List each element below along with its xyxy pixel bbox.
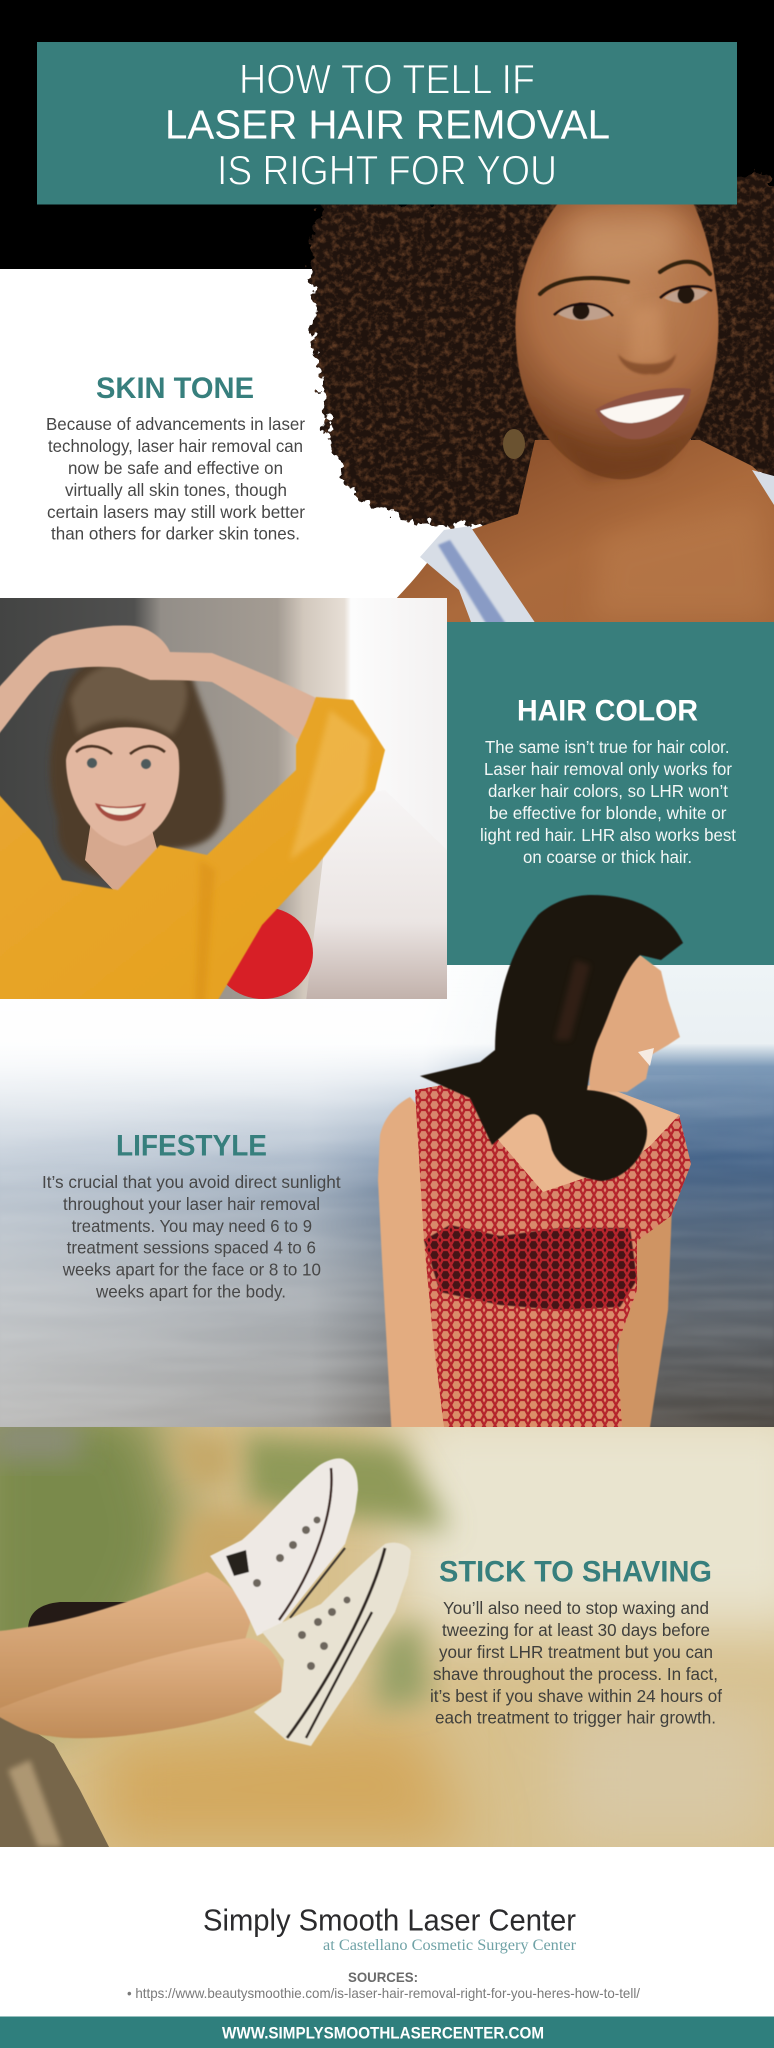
room background — [0, 598, 447, 999]
text: lifestyle body: treatments. You may need 6 to 9 — [72, 1216, 312, 1236]
smile — [638, 1048, 654, 1066]
face — [66, 727, 179, 846]
sources: SOURCES: — [348, 1969, 418, 1985]
text: hair color body: be effective for blonde, white or — [489, 803, 727, 823]
title line 3: IS RIGHT FOR YOU — [217, 147, 557, 194]
eyes and brows — [540, 262, 712, 320]
text: lifestyle body: It’s crucial that you avoid direct sunlight — [42, 1172, 341, 1192]
panel: stick to shaving — [0, 1400, 774, 1847]
photo: woman in yellow shirt with arms raised — [0, 598, 447, 1010]
heading: hair color: HAIR COLOR — [517, 695, 698, 728]
car door — [0, 1710, 109, 1847]
text: lifestyle body: throughout your laser hair removal — [63, 1194, 320, 1214]
face — [515, 200, 718, 479]
neck — [85, 825, 157, 890]
text: stick to shaving body: your first LHR treatment but you can — [439, 1642, 713, 1662]
red balloon — [226, 908, 313, 999]
photo: crossed legs in white sneakers out of a car window — [0, 1400, 774, 1847]
text: skin tone body: certain lasers may still work better — [47, 502, 305, 522]
panel: skin tone — [46, 170, 774, 630]
text: skin tone body: now be safe and effective on — [68, 458, 283, 478]
text: skin tone body: virtually all skin tones, though — [65, 480, 287, 500]
logo: at Castellano Cosmetic Surgery Center — [323, 1937, 577, 1954]
text: stick to shaving body: tweezing for at least 30 days before — [442, 1620, 710, 1640]
window sill and wall — [306, 808, 447, 999]
sources: • https://www.beautysmoothie.com/is-laser-hair-removal-right-for-you-heres-how-to-tell/ — [127, 1985, 640, 2001]
blurred road and grass background — [0, 1400, 774, 1847]
logo — [203, 1903, 577, 1954]
text: stick to shaving body — [430, 1598, 722, 1728]
right arm — [618, 1213, 672, 1427]
text: lifestyle body: weeks apart for the face or 8 to 10 — [62, 1260, 321, 1280]
text: skin tone body — [46, 414, 305, 544]
text: lifestyle body: weeks apart for the body. — [95, 1282, 286, 1302]
hair — [50, 653, 224, 880]
teal box — [447, 622, 774, 965]
text: hair color body: darker hair colors, so LHR won’t — [488, 781, 728, 801]
sources — [127, 1969, 640, 2001]
net dress — [415, 1081, 691, 1427]
text: skin tone body: Because of advancements in laser — [46, 414, 305, 434]
title line 1: HOW TO TELL IF — [239, 56, 535, 103]
hair — [309, 170, 774, 527]
text: hair color body: on coarse or thick hair. — [523, 847, 692, 867]
title banner — [37, 42, 737, 204]
panel: lifestyle — [42, 895, 691, 1440]
text: skin tone body: technology, laser hair removal can — [48, 436, 303, 456]
title line 2: LASER HAIR REMOVAL — [165, 101, 610, 147]
neck and chest — [498, 1085, 680, 1192]
bikini top — [424, 1225, 637, 1310]
nose shadow — [618, 354, 676, 374]
text: stick to shaving body: each treatment to trigger hair growth. — [435, 1708, 716, 1728]
black header background — [0, 0, 774, 269]
text: hair color body — [480, 737, 736, 867]
hair — [420, 895, 683, 1181]
text: lifestyle body: treatment sessions spaced 4 to 6 — [67, 1238, 316, 1258]
photo: woman at the sea in red net dress — [378, 895, 691, 1440]
panel: lifestyle background, sea and sky — [0, 965, 774, 1427]
text: stick to shaving body: You’ll also need to stop waxing and — [443, 1598, 709, 1618]
footer — [0, 1903, 774, 2048]
heading: skin tone: SKIN TONE — [96, 372, 254, 405]
logo: Simply Smooth Laser Center — [203, 1903, 576, 1938]
text: stick to shaving body: it’s best if you shave within 24 hours of — [430, 1686, 722, 1706]
text: skin tone body: than others for darker skin tones. — [51, 524, 300, 544]
raised arms — [0, 625, 320, 745]
car mirror — [28, 1602, 128, 1628]
website bar — [0, 2016, 774, 2048]
left arm — [378, 1096, 444, 1427]
text: hair color body: light red hair. LHR also works best — [480, 825, 736, 845]
website bar: WWW.SIMPLYSMOOTHLASERCENTER.COM — [222, 2024, 544, 2042]
earring — [503, 429, 525, 459]
panel: hair color — [447, 622, 774, 965]
text: stick to shaving body: shave throughout the process. In fact, — [433, 1664, 718, 1684]
heading: lifestyle: LIFESTYLE — [116, 1130, 267, 1163]
shoulder, neck and chest — [396, 440, 774, 622]
text: hair color body: Laser hair removal only works for — [484, 759, 732, 779]
facial features — [76, 746, 165, 821]
sneakers — [210, 1458, 411, 1746]
text: hair color body: The same isn’t true for hair color. — [485, 737, 730, 757]
heading: stick to shaving: STICK TO SHAVING — [439, 1555, 712, 1588]
banner box — [37, 42, 737, 204]
yellow shirt — [0, 697, 385, 1010]
face in profile — [585, 955, 680, 1092]
legs — [0, 1572, 286, 1738]
tank top strap — [420, 470, 774, 630]
text: lifestyle body — [42, 1172, 341, 1302]
smile — [595, 388, 691, 439]
photo: smiling woman with curly hair — [309, 170, 774, 630]
